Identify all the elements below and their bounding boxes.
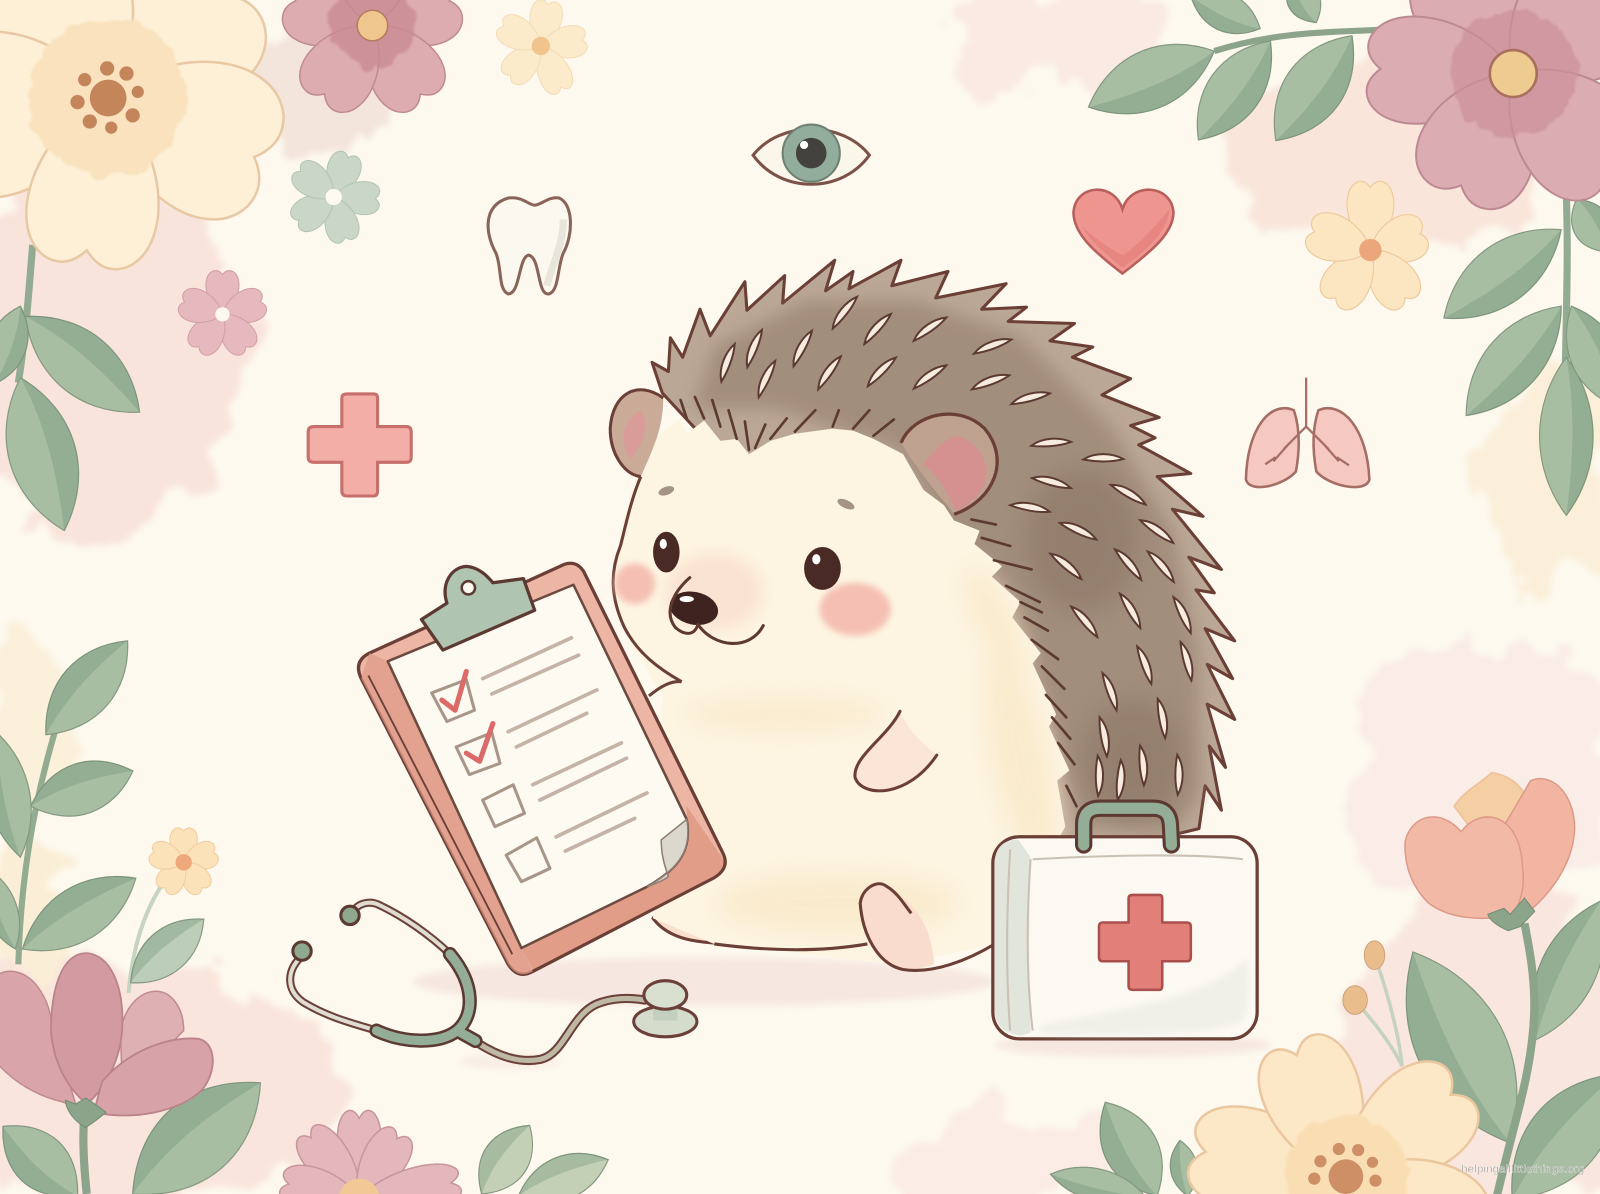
right foot [860,884,995,970]
checklist text lines [483,638,647,851]
clip [421,566,535,650]
cream face and belly [614,418,1069,964]
Y joint [377,954,476,1041]
handle [1084,808,1171,845]
case red cross [1099,895,1191,990]
board [359,563,725,974]
eyebrows [657,484,856,512]
big yellow flower [0,0,298,274]
paper sheet [388,585,688,948]
pink flower, top [276,0,468,122]
hedgehog character [610,260,1235,970]
health icons around the hedgehog [308,125,1369,496]
icon: heart [1073,190,1173,274]
ear tips [341,906,359,925]
watermark: helpingalllittlethings.org [1461,1164,1584,1176]
flower centre [70,61,144,134]
spiny back [652,260,1235,878]
case seam lines [1007,849,1243,1031]
bottom-right floral group [1047,773,1600,1194]
large pink flower, top right [1366,0,1600,221]
paper curl [647,819,688,887]
calyx [1488,898,1535,931]
pink flower, bottom [277,1110,464,1194]
branch and leaves, right [1426,190,1600,515]
case body [993,837,1257,1039]
right arm [855,711,937,791]
cheeks [614,563,891,636]
icon: tooth [488,198,570,294]
fringe quill strokes [681,397,1077,806]
snout shading [665,553,763,631]
tubes [290,903,450,1030]
stem and leaves, top-left [0,245,159,540]
case lower shading [1041,959,1249,1035]
large yellow flower, bottom right [1183,1025,1501,1194]
coral tulip [1405,773,1575,931]
stethoscope [290,903,697,1060]
top-right floral group [1076,0,1600,515]
eyes [653,532,841,590]
pink tulip, bottom left [0,953,213,1128]
bottom-left floral group [0,623,616,1194]
case side band [995,840,1031,1036]
board darker edge [361,653,533,974]
branch and leaves, top [1076,0,1400,158]
small pink flower [176,271,269,359]
branch and leaves, left [0,623,286,1194]
left hand [649,682,682,696]
right ear [901,414,997,514]
left ear [610,390,663,477]
small green flower [286,148,380,246]
left leg [653,888,745,944]
leaves, bottom centre [463,1112,616,1194]
check marks [442,671,493,761]
clipboard with checklist [359,563,725,974]
calyx [65,1098,106,1128]
quill highlights [721,293,1203,800]
small yellow flower, top [493,0,588,98]
checkboxes [432,680,550,882]
icon: lungs [1246,378,1369,487]
ground shadow [413,957,1270,1069]
darker wash on the back [694,301,1199,832]
icon: medical cross [308,394,411,496]
small yellow flower, left [147,828,221,898]
belly shading [684,559,1072,934]
head outline [613,477,682,682]
board inner edge line [368,676,512,954]
icon: eye [753,125,869,184]
top-left floral group [0,0,588,540]
nose and smile [667,578,763,643]
stems and leaves, bottom right [1047,889,1600,1194]
body base line [714,944,867,950]
first aid kit [993,808,1257,1039]
right arm outline [855,711,937,791]
chest piece [634,1006,697,1037]
yellow flower, right [1302,181,1432,316]
